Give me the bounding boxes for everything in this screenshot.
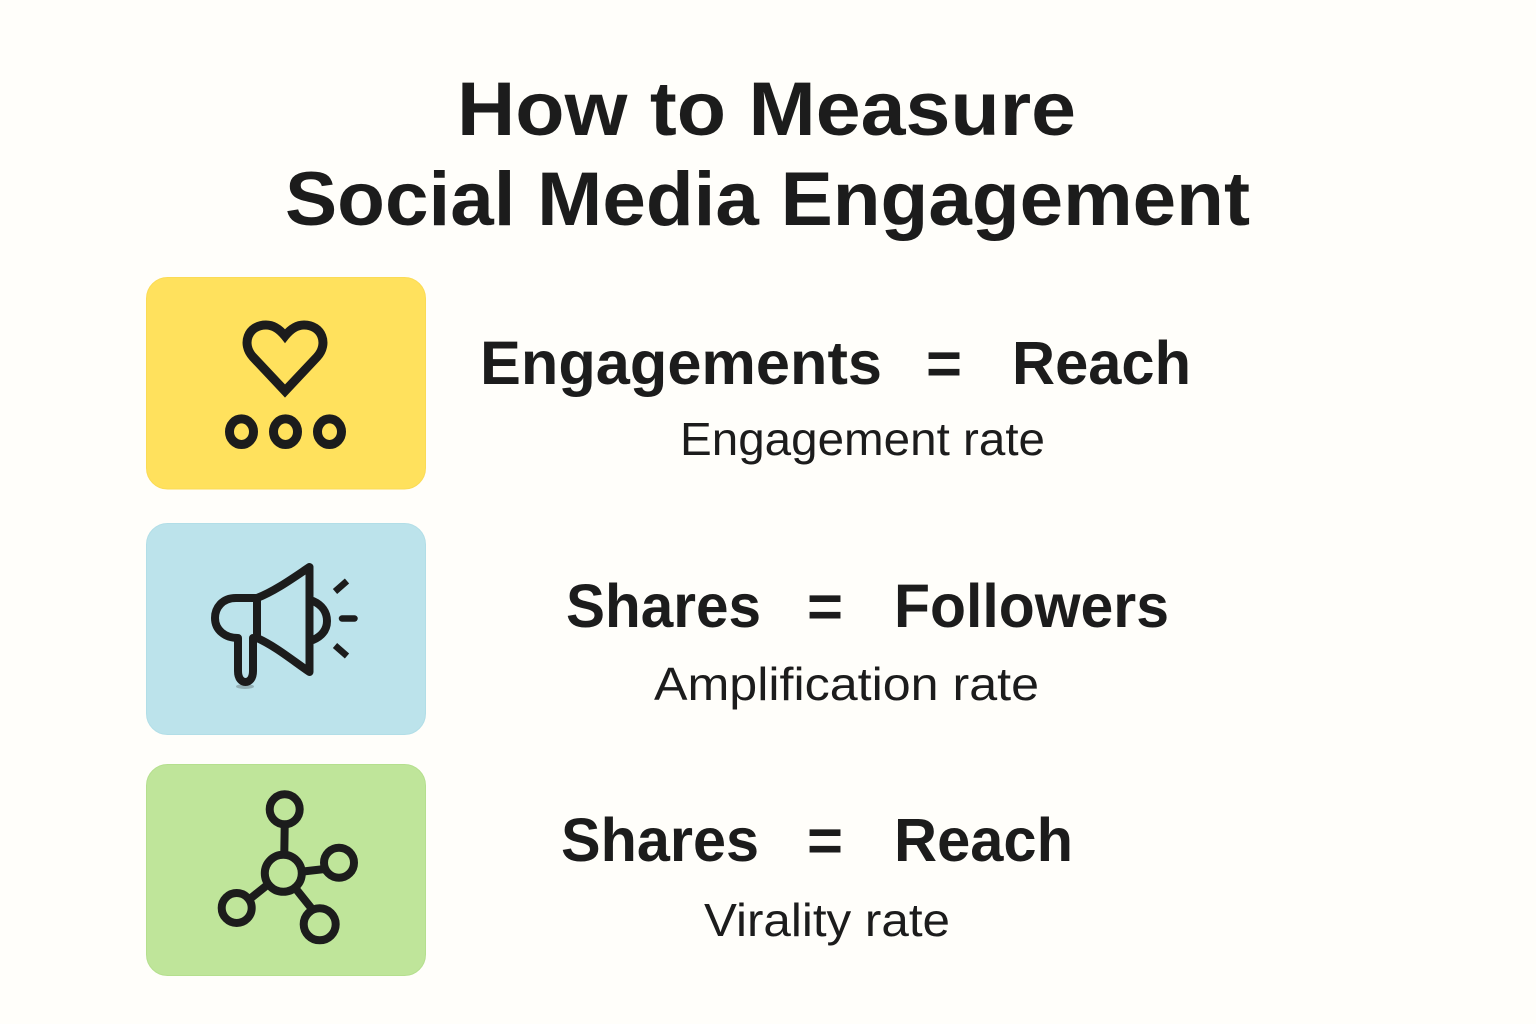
formula: shares equals reach: Reach (894, 806, 1073, 874)
formula: shares equals followers (566, 572, 1169, 640)
title: How to Measure (457, 67, 1076, 152)
formula: engagements equals reach: = (926, 329, 962, 397)
formula: engagements equals reach: Reach (1012, 329, 1191, 397)
formula: shares equals followers: = (807, 572, 843, 640)
label: amplification rate: Amplification rate (654, 658, 1039, 710)
panel: amplification rate (146, 524, 1169, 734)
formula: engagements equals reach: Engagements (480, 329, 882, 397)
title (285, 67, 1250, 242)
blue icon card (146, 524, 426, 734)
label: engagement rate: Engagement rate (680, 413, 1045, 465)
formula: shares equals reach (561, 806, 1073, 874)
panel: engagement rate (146, 278, 1191, 489)
formula: engagements equals reach (480, 329, 1191, 397)
icon: network nodes (222, 794, 354, 940)
yellow icon card (146, 278, 426, 489)
green icon card (146, 764, 426, 976)
title: Social Media Engagement (285, 157, 1250, 242)
formula: shares equals reach: = (807, 806, 843, 874)
panel: virality rate (146, 764, 1073, 976)
icon: heart with three dots (230, 325, 342, 445)
formula: shares equals followers: Shares (566, 572, 761, 640)
formula: shares equals reach: Shares (561, 806, 759, 874)
label: virality rate: Virality rate (704, 894, 950, 946)
icon: megaphone (215, 567, 354, 689)
formula: shares equals followers: Followers (894, 572, 1169, 640)
